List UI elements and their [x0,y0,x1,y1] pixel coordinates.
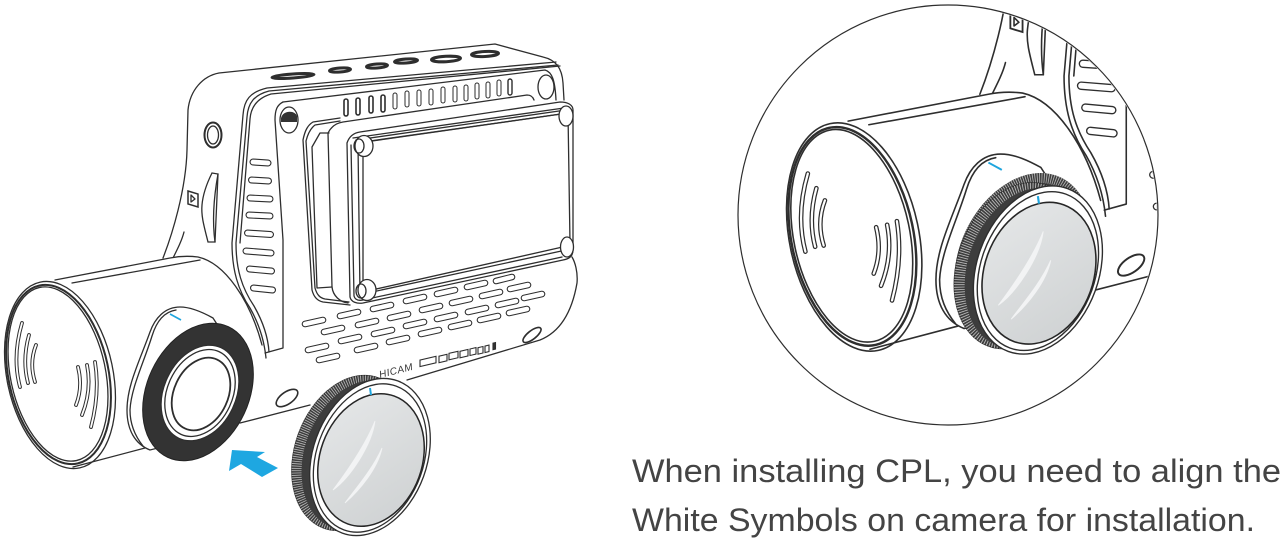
circular close-up view [737,4,1159,426]
top slots row [344,79,512,116]
memory card slot [188,173,218,242]
illustration: dash camera with lens [0,44,577,479]
CPL filter [271,359,451,545]
text line two: White Symbols on camera for installation. [632,502,1255,538]
model marks [420,343,496,368]
screen corner knobs [354,106,574,300]
brand label: HICAM [378,362,415,381]
knurled ring [271,359,434,545]
close-up camera [786,13,1157,355]
instruction text [632,453,1281,538]
top buttons [272,51,499,79]
camera body outline [163,44,577,423]
filter face rim [289,361,451,545]
glass reflections [333,421,382,503]
side vents [246,162,272,290]
icon: blue insertion arrow [229,450,278,477]
rotating camera barrel [0,256,263,479]
lens housing [127,307,240,450]
filter glass [300,379,442,541]
grille vents [305,277,542,360]
power button [204,122,222,148]
screw and corner circle [280,75,554,133]
filter inner rim [294,368,446,545]
screen module [303,95,573,305]
lens black ring [121,305,275,479]
lens hood blue mark [170,314,181,320]
filter blue mark [370,388,371,395]
mounting holes [273,325,543,410]
text line one: When installing CPL, you need to align the [632,453,1281,489]
close-up circle outline [738,5,1158,425]
